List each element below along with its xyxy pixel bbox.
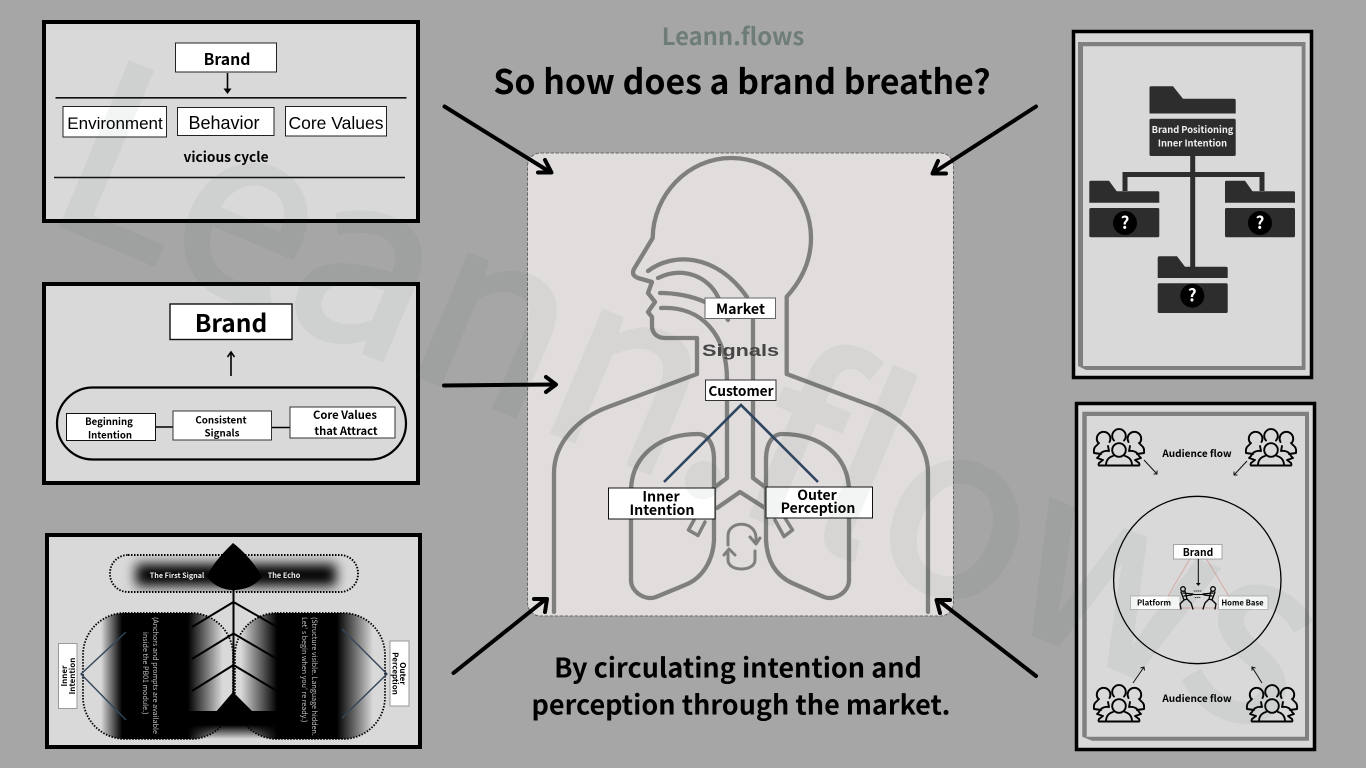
folder: unknown right: ? — [1256, 209, 1264, 234]
folder: unknown right — [1225, 181, 1295, 237]
folder: unknown left: ? — [1121, 209, 1129, 234]
audience icon bottom right — [1247, 685, 1297, 722]
left lobe — [83, 613, 233, 739]
box: core values: Core Values — [288, 113, 384, 133]
box: consistent signals: Signals — [205, 426, 240, 440]
box: outer perception — [390, 641, 409, 706]
rotated note: structure: (Structure visible. Language hidden. — [309, 617, 319, 736]
airways — [648, 259, 747, 297]
main title: So how does a brand breathe? — [493, 55, 991, 104]
up arrow — [228, 352, 234, 376]
top cone — [207, 543, 262, 590]
box: environment — [63, 106, 166, 137]
box: beginning intention: Beginning — [85, 414, 133, 428]
cycle arrows icon — [724, 524, 760, 569]
panel: fishbone signal diagram — [47, 535, 420, 747]
box: platform: Platform — [1137, 598, 1171, 608]
label: audience flow top: Audience flow — [1161, 445, 1232, 460]
box: outer perception: Perception — [390, 652, 400, 695]
brand name heading: Leann.flows — [662, 17, 804, 52]
arrow: bottom left — [454, 599, 547, 673]
box: behavior — [178, 108, 274, 136]
folder: unknown left — [1089, 181, 1159, 237]
panel: consistent signals — [44, 284, 418, 483]
folder: unknown bottom — [1158, 256, 1228, 313]
panel: audience flow — [1076, 404, 1314, 750]
audience icon top left — [1094, 429, 1144, 466]
box: core values — [286, 106, 386, 136]
signal pill — [57, 388, 406, 460]
blue connector right — [342, 629, 387, 718]
label: market — [705, 298, 776, 319]
label: outer perception: Outer — [797, 485, 838, 505]
top pill with shaded band — [110, 555, 358, 592]
tug of war figures — [1180, 587, 1216, 609]
folder: brand positioning — [1150, 86, 1236, 156]
box: brand: Brand — [1183, 544, 1213, 559]
panel: folder hierarchy — [1074, 32, 1312, 378]
audience icon top right — [1246, 429, 1296, 466]
fishbone spine and branches — [192, 585, 277, 716]
brand box — [176, 43, 276, 72]
box: core values that attract: Core Values — [313, 407, 377, 423]
label: inner intention: Intention — [629, 500, 695, 520]
bottom shaded band — [185, 711, 285, 739]
arrow: middle left — [444, 377, 556, 392]
closing statement — [532, 646, 950, 722]
audience icon bottom left — [1094, 685, 1144, 722]
box: beginning intention: Intention — [88, 428, 132, 442]
market circle — [1114, 496, 1281, 664]
blue connector lines — [664, 405, 818, 482]
box: inner intention: Inner — [59, 665, 70, 687]
right lobe — [235, 613, 385, 739]
label: customer: Customer — [708, 380, 774, 400]
brand arrow — [1196, 559, 1201, 586]
tree connectors — [1125, 156, 1262, 268]
label: audience flow bottom: Audience flow — [1161, 690, 1232, 705]
box: home base: Home Base — [1221, 598, 1264, 608]
box: brand — [1174, 544, 1222, 559]
box: consistent signals: Consistent — [195, 412, 247, 426]
box: core values that attract — [290, 407, 395, 439]
brand box: Brand — [195, 305, 267, 340]
label: outer perception: Perception — [781, 498, 855, 518]
label: inner intention — [608, 486, 715, 520]
label: market: Market — [716, 299, 765, 319]
pink triangle — [1161, 545, 1236, 608]
box: beginning intention — [66, 414, 156, 442]
bronchi — [688, 520, 705, 536]
left lung — [631, 434, 714, 598]
box: core values that attract: that Attract — [314, 423, 378, 439]
blue connector left — [81, 632, 126, 720]
arrow: top left — [444, 106, 552, 172]
label: signals: Signals — [702, 341, 779, 360]
box: behavior: Behavior — [188, 113, 260, 133]
label: the first signal: The First Signal — [150, 571, 205, 581]
arrow: bottom right — [936, 600, 1036, 676]
rotated note: anchors — [140, 617, 160, 734]
box: platform — [1130, 596, 1180, 610]
rotated note: anchors: (Anchors and prompts are available — [150, 617, 160, 734]
box: inner intention: Intention — [67, 658, 78, 694]
box: outer perception: Outer — [397, 662, 408, 685]
rotated note: anchors: inside the PB01 module.) — [140, 632, 150, 714]
down arrow — [224, 73, 232, 94]
folder: brand positioning: Inner Intention — [1158, 136, 1227, 150]
closing statement: perception through the market. — [532, 684, 950, 722]
box: inner intention — [58, 644, 78, 708]
panel: brand above cycle — [44, 22, 418, 221]
caption: vicious cycle: vicious cycle — [183, 146, 269, 166]
closing statement: By circulating intention and — [554, 646, 922, 686]
body outline — [554, 158, 928, 612]
folder: brand positioning: Brand Positioning — [1152, 122, 1234, 136]
arrow: top right — [932, 106, 1036, 174]
box: home base — [1218, 596, 1268, 610]
label: outer perception — [766, 485, 872, 518]
bottom triangle — [215, 692, 254, 713]
box: environment: Environment — [67, 114, 163, 133]
rotated note: structure: Let' s begin when you' re ready.) — [299, 617, 309, 722]
brand box — [170, 304, 292, 340]
label: the echo: The Echo — [268, 571, 301, 581]
right lung — [766, 434, 849, 598]
small flow arrows — [1133, 460, 1262, 683]
brand box: Brand — [204, 47, 250, 70]
rotated note: structure — [299, 617, 319, 736]
panel: breathing body diagram — [528, 153, 954, 616]
box: consistent signals — [173, 411, 272, 440]
label: inner intention: Inner — [642, 486, 680, 506]
folder: unknown bottom: ? — [1188, 282, 1197, 307]
